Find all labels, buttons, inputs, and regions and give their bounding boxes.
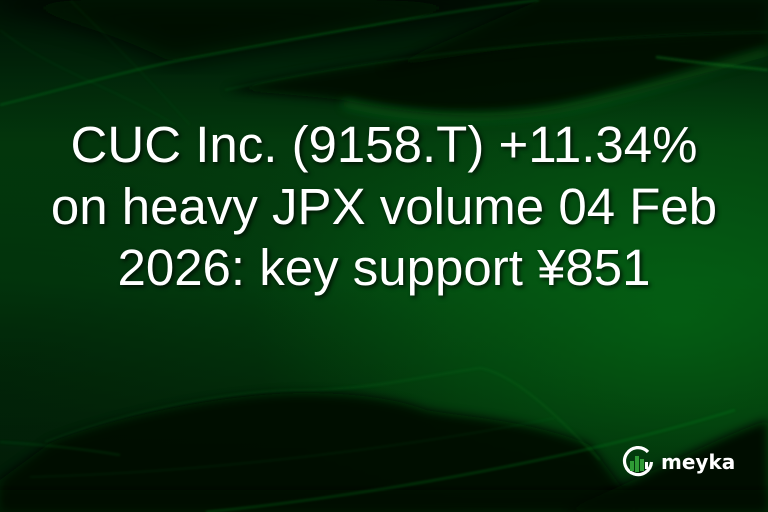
top dark lens: [225, 32, 768, 116]
logo: meyka: [622, 446, 735, 476]
title: 2026: key support ¥851: [117, 239, 651, 296]
title: on heavy JPX volume 04 Feb: [51, 178, 717, 234]
title: [51, 116, 720, 300]
icon: circular arrow with bars: [622, 446, 654, 476]
brand name: meyka: [661, 450, 735, 474]
bottom dark hump: [0, 393, 640, 512]
title: CUC Inc. (9158.T) +11.34%: [71, 116, 697, 173]
